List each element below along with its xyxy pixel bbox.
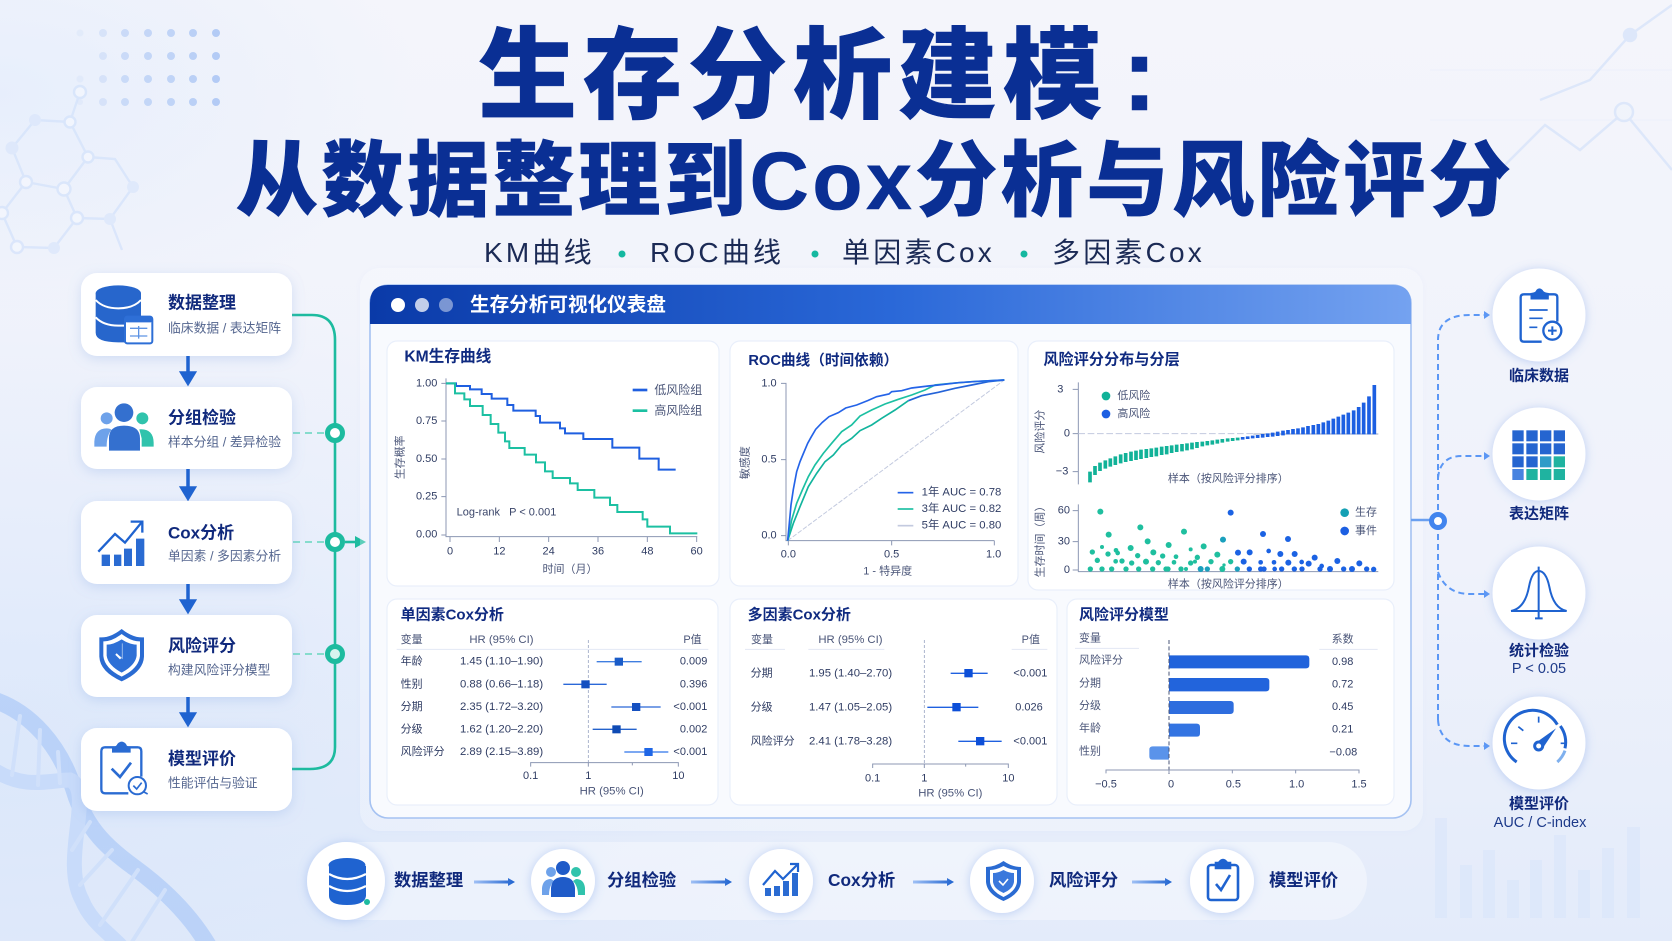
card: 分组检验 <box>81 387 292 469</box>
table header: HR (95% CI) <box>818 634 883 646</box>
y label: 生存概率 <box>393 435 407 479</box>
table header: P值 <box>683 633 702 646</box>
card: 数据整理: 数据整理 <box>168 294 236 312</box>
right item: 模型评价: AUC / C-index <box>1494 815 1587 831</box>
x label: 1 - 特异度 <box>863 564 912 578</box>
axes <box>781 383 994 545</box>
table rows: <0.001 <box>1013 735 1047 747</box>
subtitle <box>484 237 1205 268</box>
table rows: 0.026 <box>1015 701 1043 713</box>
step: 风险评分 <box>970 849 1118 913</box>
card: 分组检验: 分组检验 <box>168 408 236 428</box>
step: 风险评分: 风险评分 <box>1049 870 1118 890</box>
title line 2: 从数据整理到Cox分析与风险评分 <box>236 136 1515 227</box>
card: 模型评价: 模型评价 <box>168 750 236 768</box>
scatter: survival time: 30 <box>1058 536 1070 548</box>
bar chart: coefficients: 1.5 <box>1351 778 1367 790</box>
row labels and values: 0.72 <box>1332 679 1353 691</box>
subtitle: 单因素Cox <box>842 237 995 268</box>
icon: people <box>542 861 585 897</box>
decoration: DNA helix <box>0 700 208 941</box>
table rows: 风险评分 <box>401 744 445 758</box>
row labels and values: 0.45 <box>1332 701 1353 713</box>
bar chart: coefficients <box>1095 640 1367 790</box>
tick labels: 0.0 <box>761 530 777 542</box>
table rows: 0.009 <box>680 656 707 668</box>
bar chart: coefficients: 1.0 <box>1289 778 1304 790</box>
table rows: <0.001 <box>673 701 707 713</box>
icon: database <box>328 858 370 905</box>
scatter: survival time: 0 <box>1064 564 1070 576</box>
arrow <box>913 878 954 886</box>
right item: 表达矩阵 <box>1492 408 1586 522</box>
table header: HR (95% CI) <box>469 634 534 646</box>
curve: high risk <box>446 383 697 533</box>
tick labels: 0.0 <box>781 548 796 560</box>
icon: shield <box>99 629 144 681</box>
step: 模型评价: 模型评价 <box>1269 870 1338 890</box>
right item: 模型评价 <box>1492 696 1587 831</box>
bar chart: risk scores <box>1033 382 1378 485</box>
x tick labels: 60 <box>691 545 703 557</box>
x tick labels: 12 <box>493 545 505 557</box>
heading: 多因素Cox分析 <box>748 605 851 623</box>
legend: 3年 AUC = 0.82 <box>922 501 1001 515</box>
table header: 系数 <box>1332 632 1354 645</box>
table header: 变量 <box>401 632 423 646</box>
bar chart: risk scores: −3 <box>1056 466 1068 478</box>
decoration: faded bars bottom right <box>1435 818 1640 918</box>
curve: 5 year <box>788 401 908 541</box>
card: 模型评价 <box>81 728 292 811</box>
legend <box>898 485 1001 532</box>
card: Cox分析: Cox分析 <box>168 522 234 542</box>
x label: 时间（月） <box>543 562 597 575</box>
row labels and values: 性别 <box>1079 743 1101 757</box>
bar chart: coefficients: 0 <box>1168 778 1174 790</box>
icon: shield <box>986 861 1021 901</box>
heading: 风险评分模型 <box>1079 605 1169 623</box>
panel: multivariate Cox <box>730 599 1057 805</box>
connector: teal pipeline <box>292 315 366 769</box>
table rows: 年龄 <box>401 654 423 668</box>
table rows: <0.001 <box>673 746 707 758</box>
table rows: <0.001 <box>1013 667 1047 679</box>
icon: clipboard check <box>1208 860 1238 900</box>
right item: 临床数据 <box>1492 268 1586 384</box>
step: 分组检验 <box>531 849 676 913</box>
forest plot: 1 <box>921 772 927 784</box>
table rows <box>401 654 707 758</box>
table rows: 分期 <box>401 700 423 713</box>
icon: rising chart <box>763 864 798 896</box>
table header: 变量 <box>751 632 773 646</box>
panel: KM curve <box>387 341 719 586</box>
bar chart: coefficients: 0.5 <box>1226 778 1241 790</box>
icon: rising chart <box>98 522 144 566</box>
x tick labels: 36 <box>592 545 604 557</box>
curve: low risk <box>446 383 676 470</box>
table rows: 分级 <box>751 700 773 713</box>
x tick labels <box>447 545 703 557</box>
y tick labels: 1.00 <box>416 377 437 389</box>
axes <box>441 378 697 542</box>
table rows: 分期 <box>751 666 773 679</box>
row labels and values: 0.21 <box>1332 724 1353 736</box>
x tick labels: 0 <box>447 545 453 557</box>
forest plot: 0.1 <box>523 770 538 782</box>
card: 风险评分: 构建风险评分模型 <box>168 662 271 678</box>
subtitle: KM曲线 <box>484 237 595 268</box>
diagonal <box>788 380 1004 541</box>
decoration: dot grid <box>76 29 220 106</box>
table rows: 性别 <box>401 676 423 690</box>
icon: expression matrix <box>1512 430 1565 480</box>
table rows: 1.45 (1.10–1.90) <box>460 656 543 668</box>
connector: blue dashed branches <box>1411 311 1490 750</box>
icon: gauge <box>1504 710 1566 762</box>
y tick labels: 0.00 <box>416 529 437 541</box>
subtitle: ROC曲线 <box>650 237 784 268</box>
dashboard header: 生存分析可视化仪表盘 <box>470 293 666 316</box>
y tick labels: 0.75 <box>416 415 437 427</box>
right item: 统计检验: 统计检验 <box>1509 642 1569 660</box>
row labels and values: 年龄 <box>1079 721 1101 735</box>
y tick labels: 0.50 <box>416 453 437 465</box>
step: 数据整理: 数据整理 <box>394 870 463 890</box>
heading: KM生存曲线 <box>404 347 492 366</box>
heading: 单因素Cox分析 <box>401 605 504 623</box>
right item: 统计检验: P < 0.05 <box>1512 661 1566 677</box>
bar chart: risk scores: 样本（按风险评分排序） <box>1168 471 1289 485</box>
row labels and values: 风险评分 <box>1079 653 1123 667</box>
icon: clinical clipboard <box>1521 289 1561 342</box>
arrow <box>182 584 194 611</box>
table header <box>745 632 1047 649</box>
table rows: 2.35 (1.72–3.20) <box>460 701 543 713</box>
table rows: 1.62 (1.20–2.20) <box>460 723 543 735</box>
table rows: 1.47 (1.05–2.05) <box>809 701 892 713</box>
card: 模型评价: 性能评估与验证 <box>168 776 258 790</box>
forest plot: 0.1 <box>865 772 880 784</box>
table header: 变量 <box>1079 630 1101 644</box>
curve: 1 year <box>788 380 1004 541</box>
bar chart: risk scores: 低风险 <box>1117 388 1150 402</box>
bar chart: risk scores: 3 <box>1057 383 1063 395</box>
legend: 1年 AUC = 0.78 <box>922 485 1001 499</box>
bottom flow strip <box>307 842 1367 920</box>
scatter: survival time: 60 <box>1058 505 1070 517</box>
card: 数据整理: 临床数据 / 表达矩阵 <box>168 320 281 336</box>
right item: 表达矩阵: 表达矩阵 <box>1509 504 1569 522</box>
icon: bell curve <box>1511 567 1567 618</box>
step: 分组检验: 分组检验 <box>607 870 676 890</box>
tick labels: 0.5 <box>761 454 777 466</box>
table rows: 风险评分 <box>751 733 795 747</box>
title <box>236 16 1515 227</box>
bar chart: coefficients: −0.5 <box>1095 778 1117 790</box>
forest plot: 1 <box>585 770 591 782</box>
table rows: 0.88 (0.66–1.18) <box>460 678 543 690</box>
tick labels: 1.0 <box>986 548 1001 560</box>
panel: univariate Cox <box>387 599 718 805</box>
bar chart: risk scores: 高风险 <box>1117 406 1150 420</box>
arrow <box>182 469 194 498</box>
card: 风险评分 <box>81 615 292 697</box>
workflow cards <box>81 273 292 811</box>
icon: clipboard check <box>101 742 148 794</box>
step: Cox分析 <box>749 849 895 913</box>
legend <box>633 382 702 418</box>
right item: 统计检验 <box>1492 546 1586 677</box>
annotation: Log-rank P < 0.001 <box>457 506 556 518</box>
dashboard header <box>370 285 1411 324</box>
step: Cox分析: Cox分析 <box>828 870 895 890</box>
card: 数据整理 <box>81 273 292 356</box>
arrow <box>474 878 515 886</box>
bar chart: risk scores: 0 <box>1064 428 1070 440</box>
heading: 风险评分分布与分层 <box>1043 350 1180 368</box>
step: 模型评价 <box>1190 849 1338 913</box>
heading: ROC曲线（时间依赖） <box>748 351 898 369</box>
legend: 5年 AUC = 0.80 <box>922 518 1001 532</box>
row labels and values: −0.08 <box>1329 746 1357 758</box>
forest plot: 10 <box>1002 772 1014 784</box>
scatter: survival time: 事件 <box>1355 523 1377 537</box>
row labels and values: 分期 <box>1079 676 1101 689</box>
step: 数据整理 <box>307 842 463 920</box>
arrow <box>182 356 194 383</box>
card: Cox分析: 单因素 / 多因素分析 <box>168 548 281 564</box>
card: 分组检验: 样本分组 / 差异检验 <box>168 434 281 450</box>
decoration: trend lines top right <box>1430 5 1672 170</box>
table rows <box>751 666 1047 747</box>
decoration: molecule network <box>0 86 139 254</box>
arrow <box>182 697 194 724</box>
panel: ROC curve <box>730 341 1018 586</box>
row labels and values: 0.98 <box>1332 656 1353 668</box>
row labels and values <box>1079 653 1357 758</box>
table header <box>397 632 708 649</box>
scatter: survival time: 生存时间（周） <box>1033 501 1047 577</box>
curve: 3 year <box>788 380 1004 541</box>
forest plot: 10 <box>672 770 684 782</box>
table rows: 0.396 <box>680 678 707 690</box>
legend: 低风险组 <box>654 382 702 397</box>
scatter: survival time: 生存 <box>1355 505 1377 519</box>
arrow <box>1132 878 1172 886</box>
panel: dashboard <box>360 268 1423 831</box>
scatter: survival time <box>1033 501 1378 590</box>
x tick labels: 48 <box>641 545 653 557</box>
y tick labels <box>416 377 437 541</box>
table rows: 1.95 (1.40–2.70) <box>809 667 892 679</box>
bar chart: risk scores: 风险评分 <box>1033 410 1047 454</box>
forest plot <box>523 640 684 798</box>
icon: database with table <box>96 285 152 343</box>
table rows: 0.002 <box>680 723 707 735</box>
card: Cox分析 <box>81 501 292 584</box>
x tick labels: 24 <box>543 545 555 557</box>
tick labels: 1.0 <box>761 377 777 389</box>
forest plot <box>865 640 1014 799</box>
table rows: 2.41 (1.78–3.28) <box>809 735 892 747</box>
panel: risk score model <box>1067 599 1394 805</box>
tick labels <box>761 377 1001 560</box>
card: 风险评分: 风险评分 <box>168 636 236 656</box>
y tick labels: 0.25 <box>416 491 437 503</box>
right item: 临床数据: 临床数据 <box>1509 366 1569 384</box>
legend: 高风险组 <box>654 403 702 418</box>
subtitle: 多因素Cox <box>1052 237 1205 268</box>
icon: people <box>94 403 154 451</box>
scatter: survival time: 样本（按风险评分排序） <box>1168 576 1289 590</box>
y label: 敏感度 <box>738 446 752 479</box>
table rows: 分级 <box>401 722 423 735</box>
row labels and values: 分级 <box>1079 699 1101 712</box>
table rows: 2.89 (2.15–3.89) <box>460 746 543 758</box>
panel: risk score distribution <box>1028 341 1394 590</box>
tick labels: 0.5 <box>884 548 899 560</box>
forest plot: HR (95% CI) <box>580 786 644 798</box>
right item: 模型评价: 模型评价 <box>1509 794 1569 812</box>
arrow <box>691 878 732 886</box>
forest plot: HR (95% CI) <box>918 787 983 799</box>
title line 1: 生存分析建模 <box>478 20 1108 131</box>
table header <box>1075 630 1378 649</box>
table header: P值 <box>1022 633 1040 646</box>
title line 1: : <box>1122 16 1163 133</box>
